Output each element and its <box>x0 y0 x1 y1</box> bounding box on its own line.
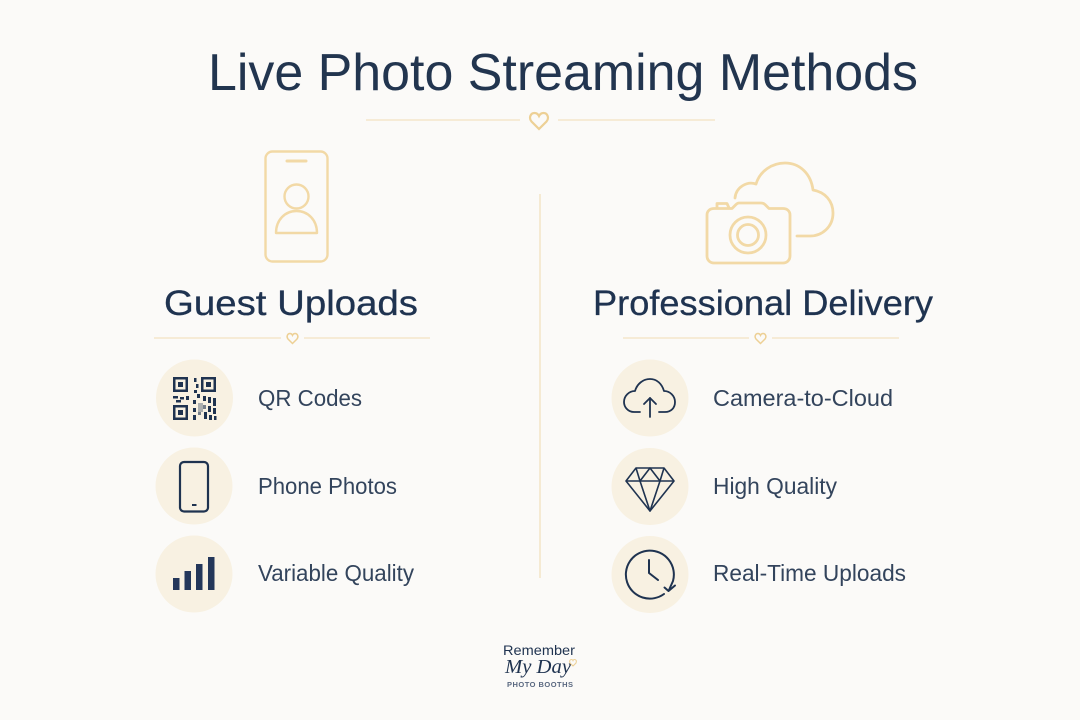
label: camera-to-cloud: Camera-to-Cloud <box>713 385 893 411</box>
logo: PHOTO BOOTHS <box>507 680 573 689</box>
panel: guest uploads <box>154 152 430 612</box>
icon: phone with person <box>266 152 328 262</box>
logo: Remember <box>503 642 575 658</box>
item: QR codes <box>156 360 362 436</box>
icon: QR code <box>173 377 216 420</box>
icon: signal bars <box>173 557 214 590</box>
title divider with heart <box>366 113 715 129</box>
item: phone photos <box>156 448 397 524</box>
guest divider with heart <box>154 334 430 344</box>
heading: guest uploads: Guest Uploads <box>164 284 418 323</box>
icon: clock with arrow <box>626 551 675 599</box>
heading: professional delivery: Professional Delivery <box>593 284 934 323</box>
icon: phone <box>180 462 208 512</box>
item: camera-to-cloud <box>612 360 893 436</box>
title: Live Photo Streaming Methods <box>208 44 918 102</box>
icon: diamond <box>626 468 674 511</box>
label: high quality: High Quality <box>713 473 837 499</box>
professional divider with heart <box>623 334 899 344</box>
item: high quality <box>612 448 837 525</box>
item: variable quality <box>156 536 414 612</box>
icon: camera and cloud <box>707 163 833 263</box>
centre divider <box>539 194 541 578</box>
label: real-time uploads: Real-Time Uploads <box>713 560 906 586</box>
item: real-time uploads <box>612 536 906 613</box>
panel: professional delivery <box>593 163 934 613</box>
logo <box>503 642 576 689</box>
logo: My Day <box>504 656 571 678</box>
label: phone photos: Phone Photos <box>258 473 397 499</box>
label: variable quality: Variable Quality <box>258 560 414 586</box>
label: QR codes: QR Codes <box>258 385 362 411</box>
icon: cloud upload <box>624 379 675 417</box>
